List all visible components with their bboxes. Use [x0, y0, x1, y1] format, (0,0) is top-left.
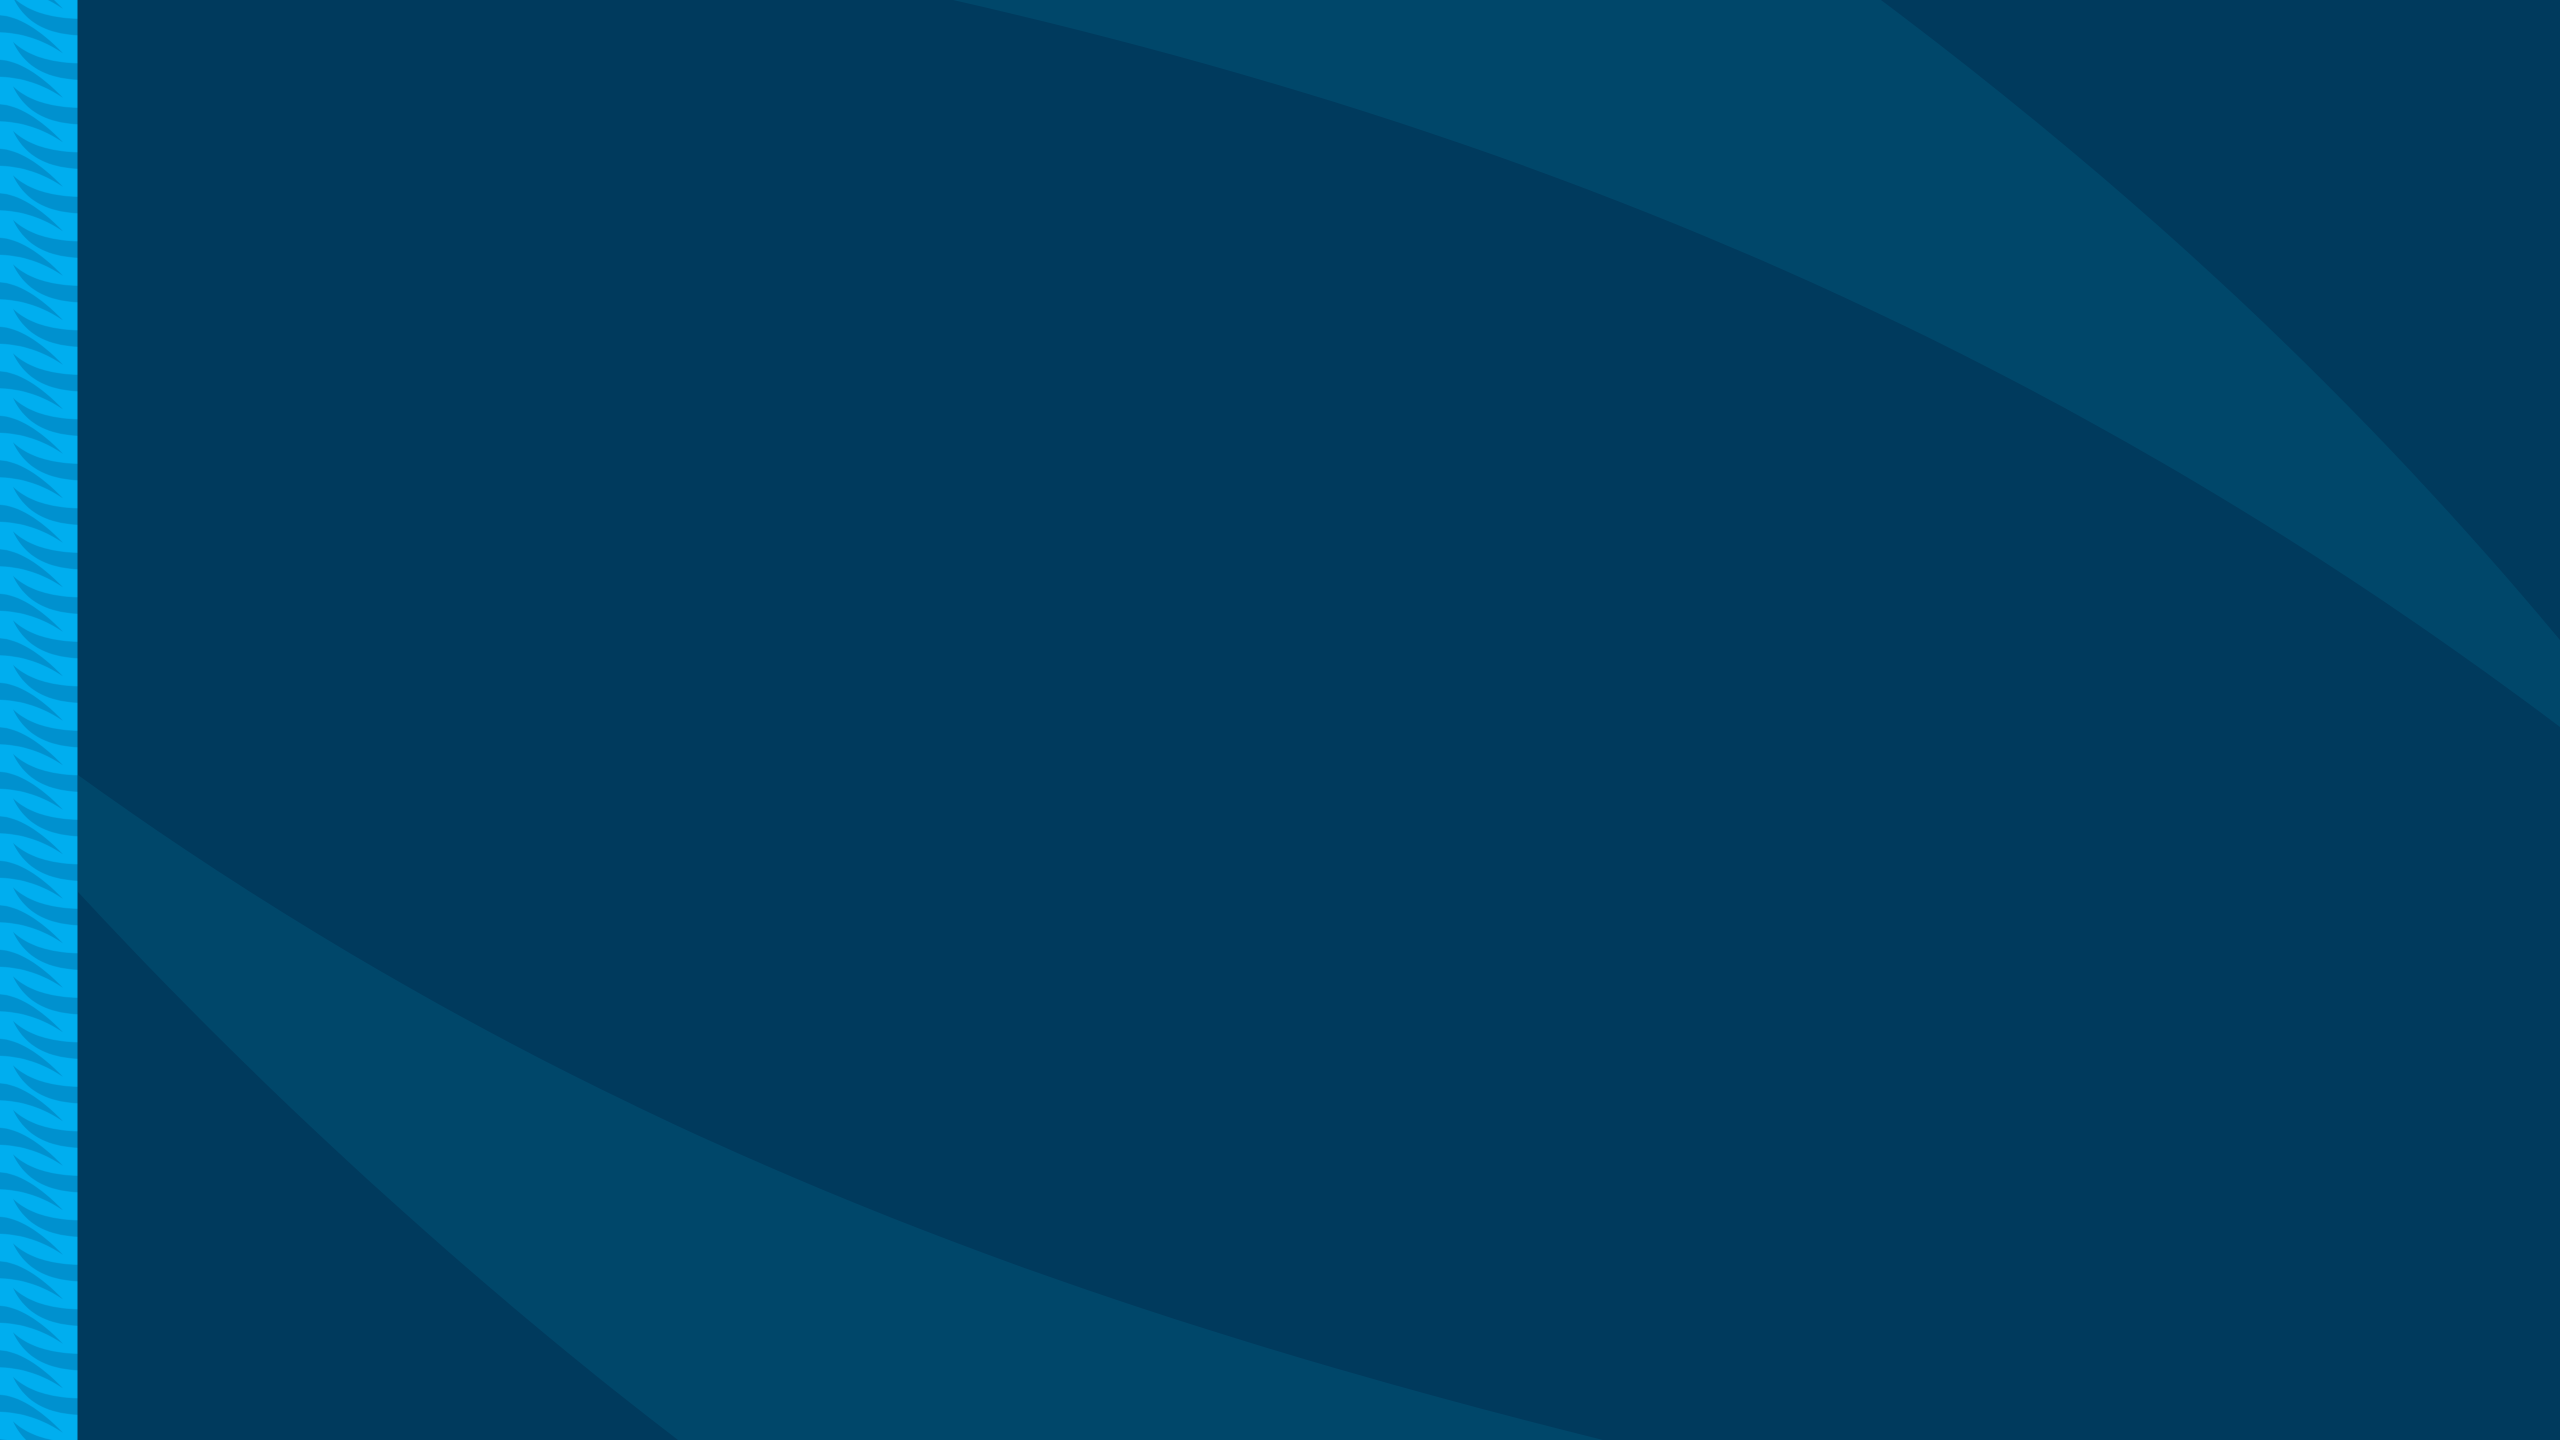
bottom-left curved band: [78, 775, 1603, 1440]
left patterned cyan strip: [0, 0, 78, 1440]
top-right curved band: [953, 0, 2560, 727]
